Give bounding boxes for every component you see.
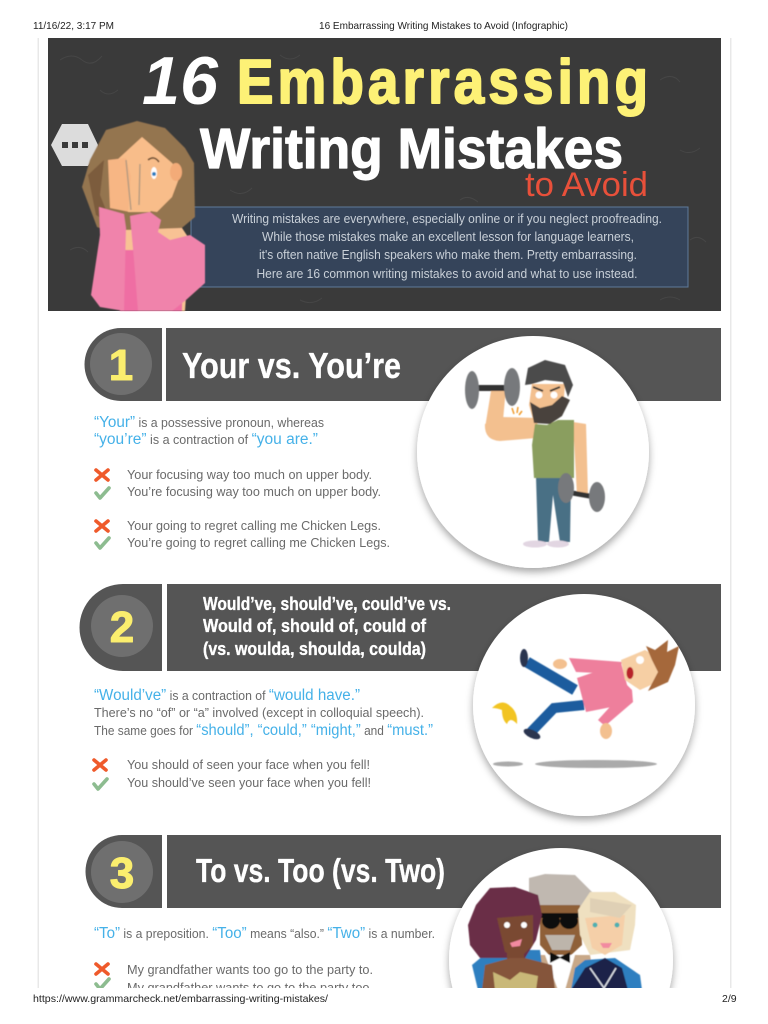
title: to Avoid: to Avoid [525,166,648,204]
section 3 number badge: 3 [110,849,134,898]
illustration: three party guests [468,874,642,990]
section 1 number badge [84,328,162,401]
section 3 examples [96,963,373,995]
section 2 number badge: 2 [110,603,134,652]
section 3 examples: My grandfather wants to go to the party too. [127,981,373,995]
illustration: embarrassed woman [82,121,205,311]
section 3 explanation: “To” is a preposition. “Too” means “also.” “Two” is a number. [94,925,435,942]
illustration: man slipping on banana [492,640,679,768]
section 1 examples: Your focusing way too much on upper body. [127,468,372,482]
section 2 explanation: “Would’ve” is a contraction of “would have.” [94,687,360,704]
section 1 explanation: “you’re” is a contraction of “you are.” [94,431,318,448]
page header: date: 11/16/22, 3:17 PM [33,20,114,32]
section 2 header bar [167,584,721,671]
section 2 explanation: The same goes for “should”, “could,” “might,” and “must.” [94,722,433,739]
section 2 explanation: There’s no “of” or “a” involved (except in colloquial speech). [94,706,424,720]
section 1 illustration circle [417,336,649,568]
section 1 examples: Your going to regret calling me Chicken Legs. [127,519,381,533]
section 3 [85,835,721,1024]
section 1 explanation [94,414,324,448]
section 2 explanation [94,687,433,739]
section 2 examples [94,758,371,790]
section 1 examples: You’re going to regret calling me Chicken Legs. [127,536,390,550]
intro text box: Here are 16 common writing mistakes to avoid and what to use instead. [256,267,638,281]
title: Writing Mistakes: Writing Mistakes [200,117,623,181]
section 3 heading: To vs. Too (vs. Two) [196,852,445,889]
section 1 [84,328,721,568]
section 1 header bar [166,328,721,401]
icon: speech bubble [51,124,101,166]
section 1 examples: You’re focusing way too much on upper body. [127,485,381,499]
section 3 illustration circle [449,848,673,1024]
section 3 examples: My grandfather wants too go to the party to. [127,963,373,977]
page footer: url: https://www.grammarcheck.net/embarrassing-writing-mistakes/ [33,993,328,1005]
section 3 number badge [85,835,162,908]
section 2 examples: You should’ve seen your face when you fell! [127,776,371,790]
section 2 heading [203,594,451,659]
section 2 illustration circle [473,594,695,816]
page header: document title: 16 Embarrassing Writing Mistakes to Avoid (Infographic) [319,20,568,32]
title: 16: 16 [142,43,219,119]
section 2 heading: Would of, should of, could of [203,616,427,636]
section 2 [80,584,721,816]
intro text box: it's often native English speakers who make them. Pretty embarrassing. [259,248,637,262]
intro text box [191,207,688,287]
section 2 heading: (vs. woulda, shoulda, coulda) [203,639,426,659]
section 2 heading: Would’ve, should’ve, could’ve vs. [203,594,451,614]
section 3 header bar [167,835,721,908]
page footer: page number: 2/9 [722,993,737,1005]
illustration: weightlifter [465,360,605,548]
section 1 explanation: “Your” is a possessive pronoun, whereas [94,414,324,431]
section 2 examples: You should of seen your face when you fell! [127,758,370,772]
title: Embarrassing: Embarrassing [237,48,648,117]
section 1 heading: Your vs. You’re [182,345,401,386]
section 1 number badge: 1 [109,341,133,390]
intro text box: Writing mistakes are everywhere, especially online or if you neglect proofreading. [232,212,662,226]
intro text box: While those mistakes make an excellent lesson for language learners, [262,230,634,244]
section 2 number badge [80,584,162,671]
section 1 examples [96,468,390,550]
hero banner [48,38,721,311]
